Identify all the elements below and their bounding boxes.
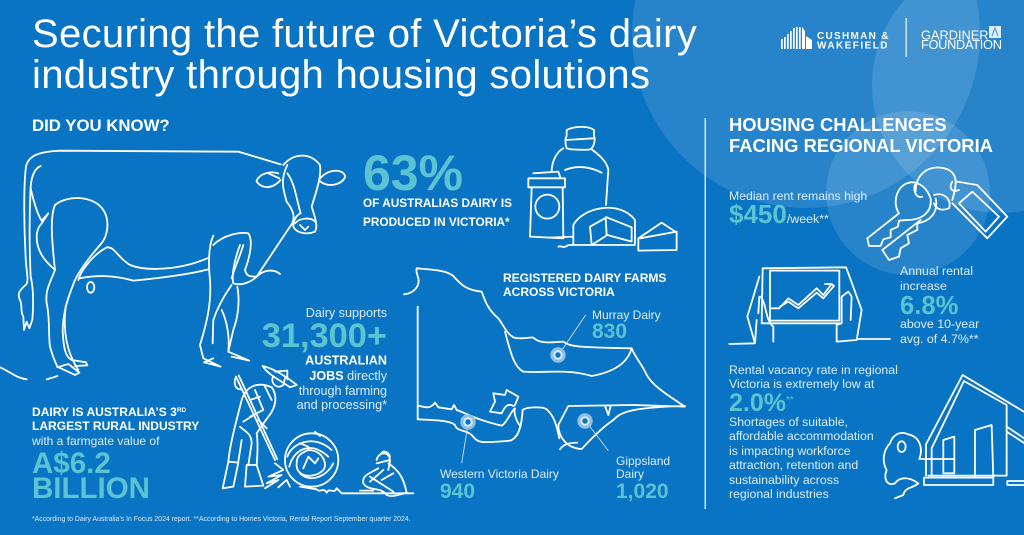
stat: rural industry value: BILLION	[32, 472, 150, 505]
heading: housing challenges: HOUSING CHALLENGES	[729, 114, 947, 135]
logo: Cushman & Wakefield	[781, 27, 890, 52]
heading: registered dairy farms: REGISTERED DAIRY FARMS	[503, 271, 666, 285]
marker: Western Victoria Dairy: Western Victoria Dairy	[440, 467, 559, 481]
stat: rental vacancy: 2.0%	[729, 389, 786, 417]
stat: rental vacancy: **	[786, 395, 794, 406]
stat: rental vacancy: regional industries	[729, 487, 829, 501]
map: registered dairy farms	[404, 268, 685, 503]
stat: rural industry value: RD	[177, 407, 187, 414]
stat: rental vacancy: Victoria is extremely low at	[729, 377, 875, 391]
stat: rental vacancy: affordable accommodation	[729, 429, 874, 443]
logo: Gardiner Foundation: GARDINER	[921, 28, 989, 42]
logo: Cushman & Wakefield: WAKEFIELD	[817, 40, 889, 52]
marker: Gippsland Dairy: 1,020	[616, 480, 669, 503]
icon: hands holding tablet with rising chart	[729, 267, 890, 344]
heading: housing challenges	[729, 114, 993, 156]
stat: annual rental increase: avg. of 4.7%**	[900, 332, 979, 346]
marker: Murray Dairy: Murray Dairy	[592, 308, 661, 322]
stat: rental vacancy	[729, 363, 898, 501]
stat: annual rental increase	[900, 264, 979, 346]
footnote: *According to Dairy Australia’s In Focus 2024 report. **According to Homes Victoria, Rental Report September quarter 2024.	[32, 516, 411, 523]
title: industry through housing solutions	[32, 53, 650, 97]
stat: rental vacancy: sustainability across	[729, 473, 839, 487]
stat: median rent: Median rent remains high	[729, 189, 867, 203]
title: Securing the future of Victoria’s dairy	[32, 12, 697, 56]
stat: rental vacancy: Shortages of suitable,	[729, 415, 848, 429]
stat: 31,300+ jobs: and processing*	[297, 398, 387, 412]
stat: 31,300+ jobs: through farming	[299, 384, 387, 398]
heading: did you know: DID YOU KNOW?	[32, 116, 170, 135]
marker: Western Victoria Dairy: 940	[440, 480, 475, 503]
stat: 31,300+ jobs: AUSTRALIAN	[305, 354, 387, 368]
logos	[781, 18, 1002, 57]
marker: Gippsland Dairy: Gippsland	[616, 454, 670, 468]
heading: registered dairy farms	[503, 271, 666, 299]
marker: Murray Dairy	[550, 308, 661, 363]
logo: Gardiner Foundation	[921, 26, 1002, 52]
stat: 31,300+ jobs: 31,300+	[262, 317, 387, 355]
title	[32, 12, 697, 97]
marker: Gippsland Dairy: Dairy	[616, 467, 644, 481]
stat: rural industry value	[31, 405, 199, 505]
stat: 63 percent: PRODUCED IN VICTORIA*	[363, 215, 510, 229]
stat: annual rental increase: above 10-year	[900, 317, 979, 331]
stat: 63 percent	[363, 145, 512, 229]
stat: rural industry value: LARGEST RURAL INDUSTRY	[32, 419, 199, 433]
stat: annual rental increase: 6.8%	[900, 292, 959, 320]
stat: rural industry value: A$6.2	[32, 447, 111, 480]
marker: Western Victoria Dairy	[440, 414, 559, 503]
stat: 31,300+ jobs: JOBS directly	[309, 369, 388, 383]
stat: 63 percent: 63%	[363, 145, 463, 201]
marker: Gippsland Dairy	[577, 413, 670, 503]
stat: rental vacancy: is impacting workforce	[729, 444, 851, 458]
logo: Cushman & Wakefield: CUSHMAN &	[817, 31, 890, 42]
stat: median rent: $450/week**	[729, 199, 829, 229]
stat: 31,300+ jobs	[262, 306, 388, 412]
logo: Gardiner Foundation: FOUNDATION	[921, 37, 1002, 52]
stat: 31,300+ jobs: Dairy supports	[306, 306, 387, 320]
icon: keys	[867, 168, 1007, 260]
stat: rural industry value: with a farmgate value of	[31, 434, 160, 448]
map outline: Victoria	[404, 268, 685, 449]
heading: housing challenges: FACING REGIONAL VICTORIA	[729, 135, 993, 156]
stat: annual rental increase: Annual rental	[900, 264, 973, 278]
icon: house and tree	[884, 375, 1024, 498]
stat: median rent	[729, 189, 867, 229]
icon: bottle, jar and cheese	[528, 127, 677, 251]
stat: rental vacancy: attraction, retention and	[729, 458, 858, 472]
stat: rural industry value: DAIRY IS AUSTRALIA’S 3	[32, 405, 177, 419]
stat: annual rental increase: increase	[900, 279, 947, 293]
stat: 63 percent: OF AUSTRALIAS DAIRY IS	[363, 196, 512, 210]
icon: cow line drawing	[0, 151, 345, 379]
marker: Murray Dairy: 830	[592, 320, 627, 343]
heading: registered dairy farms: ACROSS VICTORIA	[503, 285, 615, 299]
stat: rental vacancy: Rental vacancy rate in regional	[729, 363, 898, 377]
icon: farmer, hay bale and worker	[223, 366, 413, 496]
